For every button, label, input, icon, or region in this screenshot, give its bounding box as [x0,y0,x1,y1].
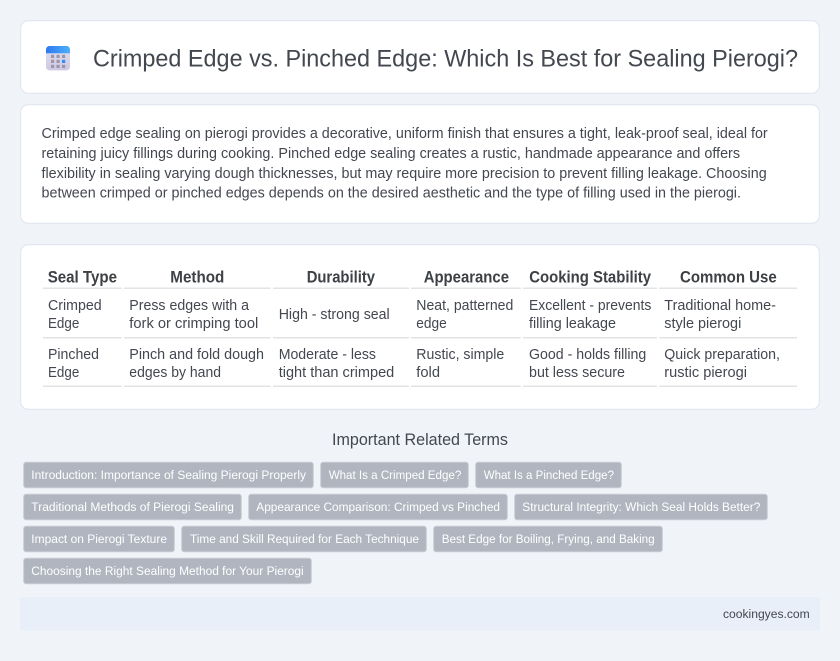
heading: important related terms: Important Related Terms [332,431,508,449]
table row: pinched edge: Pinch and fold dough [129,347,264,363]
title: Crimped Edge vs. Pinched Edge: Which Is Best for Sealing Pierogi? [93,46,798,73]
panel: introduction [21,105,819,223]
tag: time and skill: Time and Skill Required for Each Technique [190,532,419,546]
table row: pinched edge: but less secure [529,365,625,381]
table header row: Common Use [680,269,777,287]
tag: structural integrity: Structural Integrity: Which Seal Holds Better? [522,500,760,514]
table row: crimped edge: Edge [48,316,79,332]
table row: pinched edge: tight than crimped [279,365,394,381]
tag: introduction: Introduction: Importance of Sealing Pierogi Properly [31,468,307,482]
table row: crimped edge [48,298,776,332]
header panel [21,21,819,93]
tag: traditional methods: Traditional Methods of Pierogi Sealing [31,500,234,514]
tag: crimped edge [321,462,468,488]
footer source text: cookingyes.com [723,607,810,621]
table row: pinched edge: Pinched [48,347,99,363]
table header row: Seal Type [48,269,117,287]
table row: pinched edge: Rustic, simple [416,347,504,363]
tag: pinched edge: What Is a Pinched Edge? [484,468,614,482]
intro paragraph [42,126,768,202]
table row: crimped edge: fork or crimping tool [129,316,258,332]
table row: pinched edge: Edge [48,365,79,381]
tag: choosing method [24,558,311,584]
tag: appearance comparison: Appearance Comparison: Crimped vs Pinched [256,500,500,514]
intro paragraph: retaining juicy fillings during cooking. Pinched edge sealing creates a rustic, handmade appearance and offers [42,146,740,162]
table row: pinched edge: edges by hand [129,365,221,381]
table row: crimped edge: style pierogi [664,316,741,332]
tag: texture [24,526,174,552]
tag: choosing method: Choosing the Right Sealing Method for Your Pierogi [31,564,304,578]
table row: crimped edge: Excellent - prevents [529,298,651,314]
table row: crimped edge: High - strong seal [279,307,390,323]
tag: pinched edge [476,462,621,488]
tag: traditional methods [24,494,241,520]
table row: crimped edge: Neat, patterned [416,298,513,314]
table row: crimped edge: Crimped [48,298,102,314]
panel: comparison table [21,245,819,409]
table header row: Durability [307,269,375,287]
table row: pinched edge: rustic pierogi [664,365,747,381]
table row: crimped edge: Press edges with a [129,298,250,314]
tag: texture: Impact on Pierogi Texture [31,532,167,546]
table header row: Cooking Stability [529,269,651,287]
intro paragraph: between crimped or pinched edges depends on the desired aesthetic and the type of filling used in the pierogi. [42,186,741,202]
table header row [48,269,777,287]
intro paragraph: flexibility in sealing varying dough thicknesses, but may require more precision to prevent filling leakage. Choosing [42,166,767,182]
tag: best edge: Best Edge for Boiling, Frying, and Baking [442,532,655,546]
table row: pinched edge: Moderate - less [279,347,376,363]
tag: best edge [434,526,662,552]
table row: pinched edge: fold [416,365,440,381]
intro paragraph: Crimped edge sealing on pierogi provides a decorative, uniform finish that ensures a tight, leak-proof seal, ideal for [42,126,768,142]
table row: crimped edge: filling leakage [529,316,616,332]
table row: crimped edge: edge [416,316,447,332]
tag: introduction [24,462,313,488]
tag: crimped edge: What Is a Crimped Edge? [329,468,461,482]
table row: pinched edge: Quick preparation, [664,347,780,363]
footer bar [20,597,820,631]
tag: appearance comparison [249,494,507,520]
tag: structural integrity [515,494,767,520]
related term tags [24,462,767,584]
icon: calendar [46,46,70,70]
table header row: Appearance [424,269,509,287]
table row: pinched edge: Good - holds filling [529,347,646,363]
table row: crimped edge: Traditional home- [664,298,776,314]
table header row: Method [170,269,224,287]
tag: time and skill [182,526,426,552]
table row: pinched edge [48,347,780,381]
